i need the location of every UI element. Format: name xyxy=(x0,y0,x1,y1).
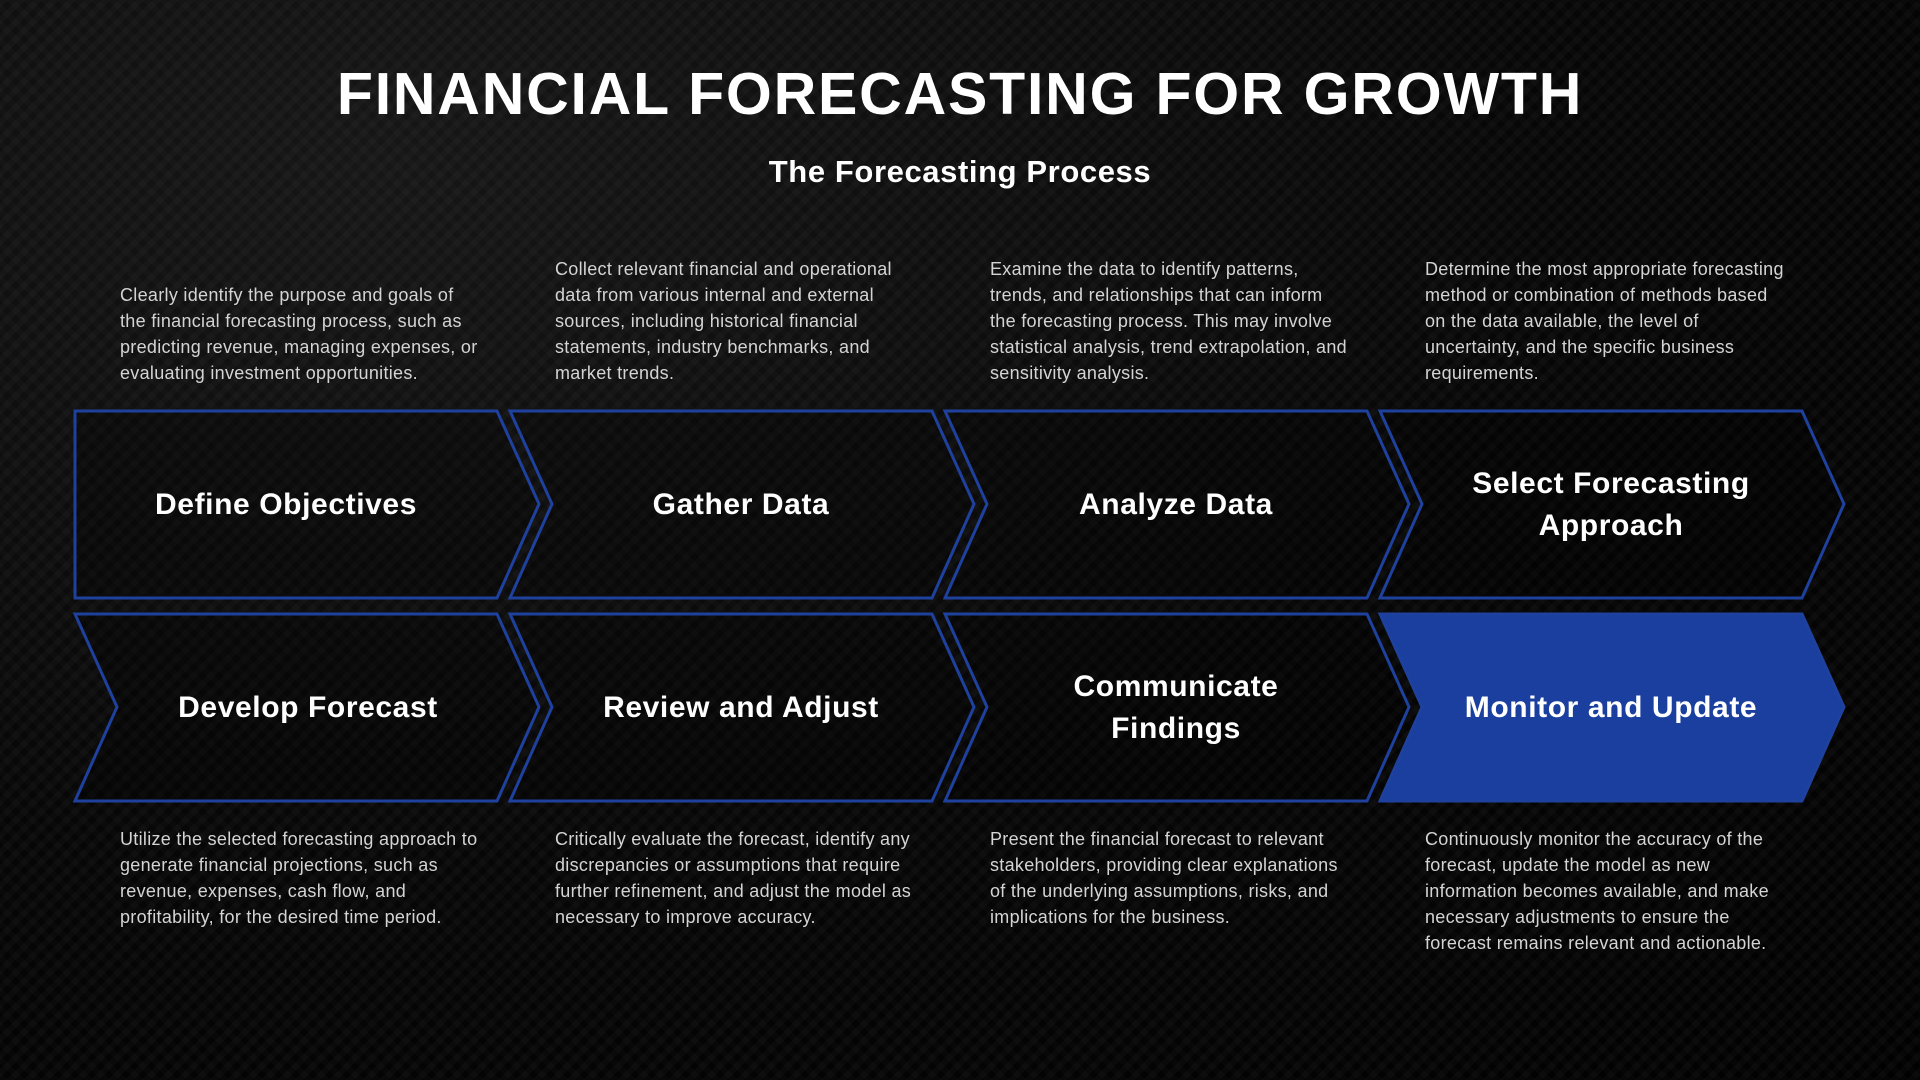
label: select approach: Approach xyxy=(1539,508,1683,542)
label: communicate findings xyxy=(1074,670,1278,744)
text: define objectives: Clearly identify the purpose and goals of the financial forecasting process, such as predicting revenue, managing expenses, or evaluating investment opportunities. xyxy=(120,285,478,383)
label: select approach xyxy=(1472,466,1750,542)
text: select approach: Determine the most appropriate forecasting method or combination of methods based on the data available, the level of uncertainty, and the specific business requirements. xyxy=(1425,259,1784,383)
label: develop forecast: Develop Forecast xyxy=(178,690,438,724)
text: communicate findings: Present the financial forecast to relevant stakeholders, providing clear explanations of the underlying assumptions, risks, and implications for the business. xyxy=(990,829,1338,927)
text: gather data: Collect relevant financial and operational data from various internal and external sources, including historical financial statements, industry benchmarks, and market trends. xyxy=(555,259,892,383)
chevron: define objectives xyxy=(75,411,539,598)
label: communicate findings: Findings xyxy=(1111,712,1241,744)
text: analyze data: Examine the data to identify patterns, trends, and relationships that can inform the forecasting process. This may involve statistical analysis, trend extrapolation, and sensitivity analysis. xyxy=(990,259,1347,383)
chevron: review and adjust xyxy=(510,614,974,801)
chevron: analyze data xyxy=(945,411,1409,598)
label: review and adjust: Review and Adjust xyxy=(603,690,879,724)
label: select approach: Select Forecasting xyxy=(1472,466,1750,500)
title: FINANCIAL FORECASTING FOR GROWTH xyxy=(337,61,1583,127)
text: review and adjust: Critically evaluate the forecast, identify any discrepancies or assumptions that require further refinement, and adjust the model as necessary to improve accuracy. xyxy=(555,829,911,927)
chevron: select approach xyxy=(1380,411,1844,598)
text: monitor and update: Continuously monitor the accuracy of the forecast, update the model as new information becomes available, and make necessary adjustments to ensure the forecast remains relevant and actionable. xyxy=(1425,829,1769,953)
chevron: communicate findings xyxy=(945,614,1409,801)
label: define objectives: Define Objectives xyxy=(155,488,417,520)
label: monitor and update: Monitor and Update xyxy=(1465,690,1757,724)
text: develop forecast: Utilize the selected forecasting approach to generate financial projections, such as revenue, expenses, cash flow, and profitability, for the desired time period. xyxy=(120,829,477,927)
subtitle: The Forecasting Process xyxy=(769,154,1151,189)
chevron: gather data xyxy=(510,411,974,598)
label: gather data: Gather Data xyxy=(653,488,829,520)
label: communicate findings: Communicate xyxy=(1074,670,1278,702)
chevron: develop forecast xyxy=(75,614,539,801)
label: analyze data: Analyze Data xyxy=(1079,488,1273,520)
chevron: monitor and update xyxy=(1380,614,1844,801)
